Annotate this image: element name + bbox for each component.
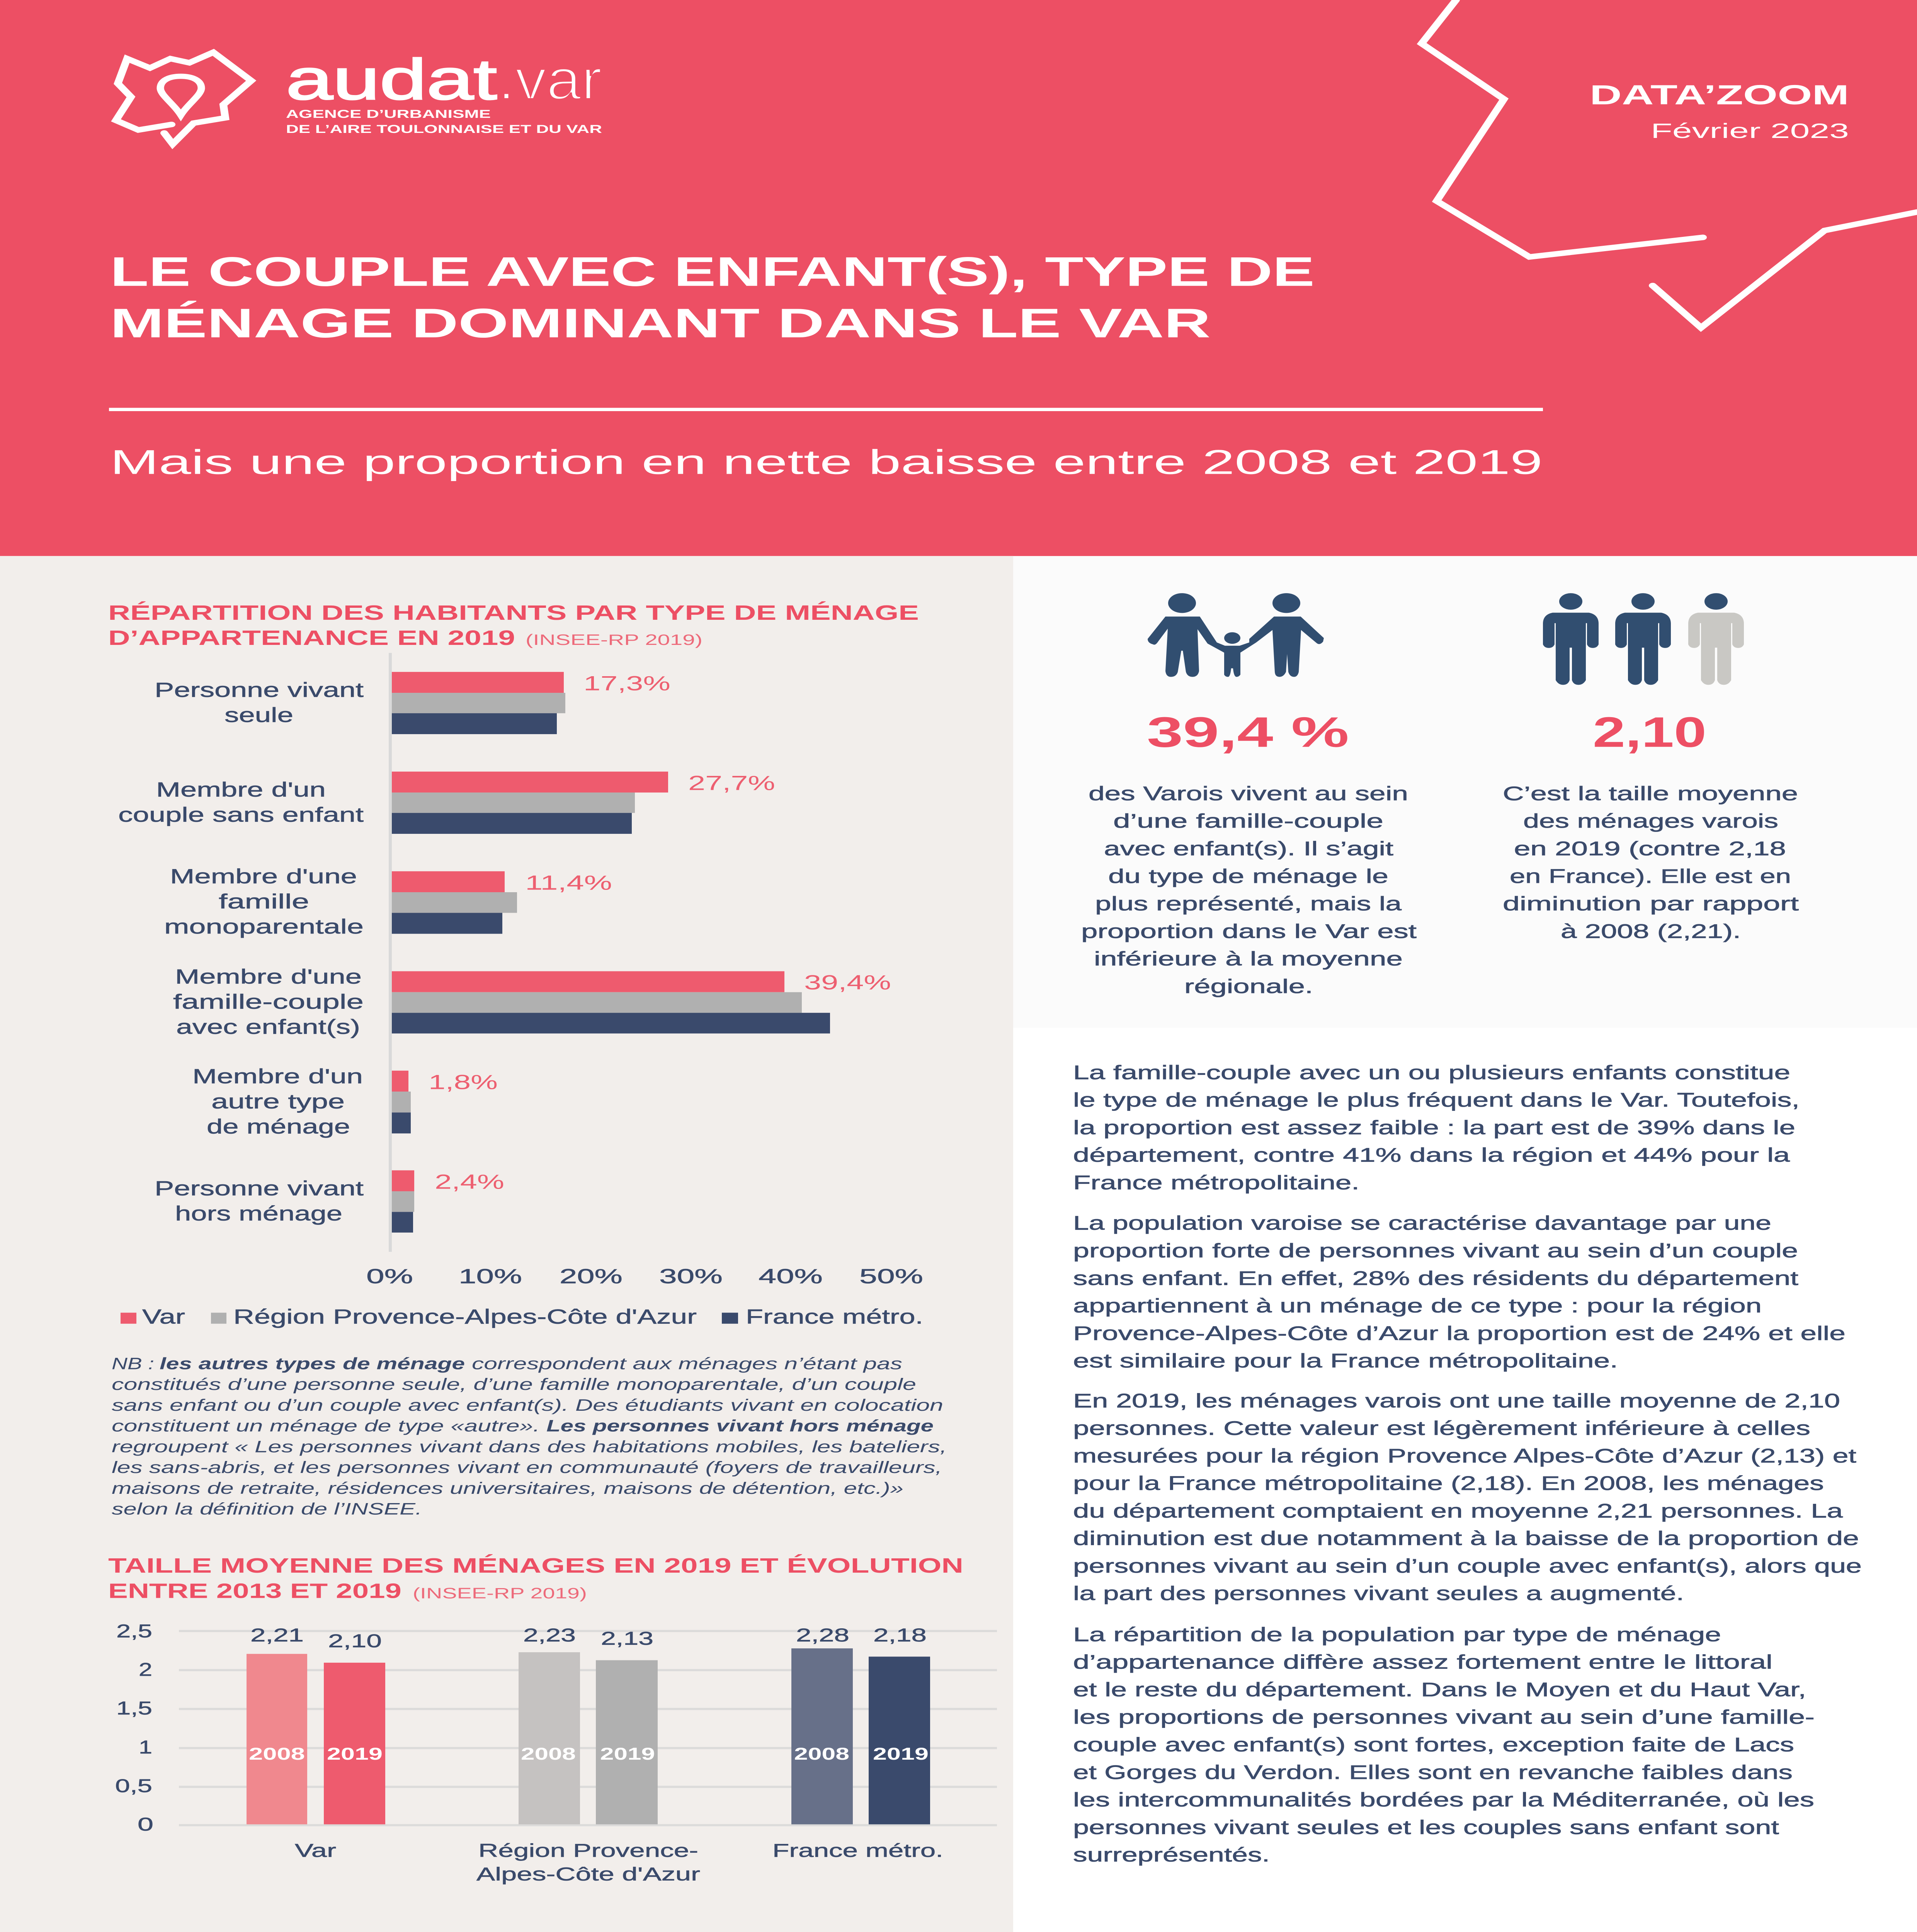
group: hors ménage: Personne vivant xyxy=(155,1177,364,1200)
group: personne vivant seule xyxy=(155,672,670,734)
note: NB definitions: regroupent « Les personnes vivant dans des habitations mobiles, les bateliers, xyxy=(112,1438,947,1456)
text block: paragraph 4: et le reste du département. Dans le Moyen et du Haut Var, xyxy=(1073,1679,1806,1701)
logo: audat.var xyxy=(116,48,602,144)
text block: paragraph 4: La répartition de la population par type de ménage xyxy=(1073,1623,1721,1646)
group: autre type de ménage: 1,8% xyxy=(429,1071,498,1094)
bars: Région: 2,23 xyxy=(523,1625,576,1646)
text block: paragraph 2: La population varoise se caractérise davantage par une xyxy=(1073,1212,1771,1234)
description: en France). Elle est en xyxy=(1510,865,1791,887)
note: NB definitions: les autres types de ménage xyxy=(160,1355,465,1373)
logo wordmark: audat xyxy=(286,48,497,112)
bars: Région: Région Provence- xyxy=(478,1840,698,1861)
group: autre type de ménage: Membre d'un xyxy=(192,1065,363,1088)
text block: paragraph 4: les proportions de personnes vivant au sein d’une famille- xyxy=(1073,1706,1815,1728)
bars: Région: Alpes-Côte d'Azur xyxy=(476,1864,700,1884)
subtitle: Mais une proportion en nette baisse entre 2008 et 2019 xyxy=(110,443,1543,481)
bars: France xyxy=(772,1625,943,1861)
bars: France: 2,28 xyxy=(796,1625,849,1646)
bars: Région xyxy=(476,1625,700,1884)
group: famille-couple avec enfants: avec enfant(s) xyxy=(176,1015,360,1038)
bars: Région: 2019 xyxy=(600,1744,655,1764)
text block: paragraph 3: du département comptaient en moyenne 2,21 personnes. La xyxy=(1073,1500,1843,1522)
bars: Région: 2008 xyxy=(521,1744,576,1764)
panel: key figure 39,4 % xyxy=(1081,593,1417,997)
description: C’est la taille moyenne xyxy=(1503,782,1798,804)
big number: 2,10 xyxy=(1593,708,1706,756)
panel: key figure 2,10 xyxy=(1503,593,1799,942)
text block: paragraph 4 xyxy=(1073,1623,1815,1866)
big number: 39,4 % xyxy=(1147,708,1349,756)
description: inférieure à la moyenne xyxy=(1094,948,1403,970)
bars: Var: 2,10 xyxy=(328,1631,382,1651)
text block: paragraph 3: personnes vivant au sein d’un couple avec enfant(s), alors que xyxy=(1073,1555,1862,1577)
panel: header banner xyxy=(0,0,1917,556)
text block: paragraph 4: couple avec enfant(s) sont fortes, exception faite de Lacs xyxy=(1073,1734,1794,1756)
text block: paragraph 4: personnes vivant seules et les couples sans enfant sont xyxy=(1073,1816,1779,1838)
heading: chart 2 xyxy=(108,1554,963,1602)
y axis labels: 2 xyxy=(139,1659,152,1680)
text block: paragraph 3: En 2019, les ménages varois ont une taille moyenne de 2,10 xyxy=(1073,1389,1840,1412)
text block: paragraph 4: les intercommunalités bordées par la Méditerranée, où les xyxy=(1073,1789,1814,1811)
group: couple sans enfant: couple sans enfant xyxy=(118,803,364,826)
heading: chart 1: RÉPARTITION DES HABITANTS PAR TYPE DE MÉNAGE xyxy=(108,601,919,624)
text block: paragraph 1 xyxy=(1073,1061,1800,1194)
x axis labels: 40% xyxy=(759,1265,823,1287)
note: NB definitions: selon la définition de l’INSEE. xyxy=(112,1500,422,1518)
text block: paragraph 3: la part des personnes vivant seules a augmenté. xyxy=(1073,1582,1684,1605)
text block: paragraph 2 xyxy=(1073,1212,1846,1372)
publication label: DATA’ZOOM xyxy=(1590,80,1849,111)
text block: paragraph 2: appartiennent à un ménage de ce type : pour la région xyxy=(1073,1295,1762,1317)
text block: paragraph 3: pour la France métropolitaine (2,18). En 2008, les ménages xyxy=(1073,1472,1824,1495)
group: famille-couple avec enfants xyxy=(173,965,891,1038)
bars: Var: 2008 xyxy=(249,1744,305,1764)
description: diminution par rapport xyxy=(1503,893,1799,915)
bars: Var: 2,21 xyxy=(250,1625,304,1646)
bars: Var: Var xyxy=(295,1840,336,1861)
text block: paragraph 2: Provence-Alpes-Côte d’Azur la proportion est de 24% et elle xyxy=(1073,1322,1846,1344)
x axis labels: 50% xyxy=(859,1265,923,1287)
group: hors ménage xyxy=(155,1170,504,1233)
x axis labels xyxy=(366,1265,923,1287)
text block: paragraph 1: France métropolitaine. xyxy=(1073,1172,1359,1194)
description: d’une famille-couple xyxy=(1113,810,1383,832)
text block: paragraph 4: et Gorges du Verdon. Elles sont en revanche faibles dans xyxy=(1073,1761,1793,1783)
y axis labels: 0,5 xyxy=(115,1775,152,1796)
note: NB definitions: correspondent aux ménages n’étant pas xyxy=(472,1355,902,1373)
description xyxy=(1503,782,1799,942)
group: autre type de ménage: de ménage xyxy=(207,1115,350,1138)
description: à 2008 (2,21). xyxy=(1561,920,1741,942)
title: LE COUPLE AVEC ENFANT(S), TYPE DE xyxy=(110,248,1315,295)
text block: paragraph 1: la proportion est assez faible : la part est de 39% dans le xyxy=(1073,1116,1795,1139)
decorative speech-bubble outline xyxy=(1422,0,1917,328)
group: famille-couple avec enfants: Membre d'une xyxy=(175,965,362,988)
group: famille monoparentale: 11,4% xyxy=(525,871,612,894)
heading: chart 1: D’APPARTENANCE EN 2019 xyxy=(108,626,515,650)
note: NB definitions: constituent un ménage de type «autre». xyxy=(112,1417,540,1435)
legend: Var xyxy=(142,1305,185,1328)
text block: paragraph 1: le type de ménage le plus fréquent dans le Var. Toutefois, xyxy=(1073,1089,1800,1111)
text block: paragraph 3: diminution est due notamment à la baisse de la proportion de xyxy=(1073,1527,1859,1549)
icon: family with child xyxy=(1148,593,1324,677)
logo tagline: AGENCE D’URBANISME xyxy=(286,107,491,121)
group: hors ménage: hors ménage xyxy=(175,1202,342,1225)
description: des Varois vivent au sein xyxy=(1089,782,1408,804)
group: famille monoparentale: monoparentale xyxy=(164,915,364,938)
heading: chart 1 xyxy=(108,601,919,650)
bars: France: 2019 xyxy=(873,1744,929,1764)
description: avec enfant(s). Il s’agit xyxy=(1104,838,1393,860)
group: couple sans enfant: Membre d'un xyxy=(156,778,326,801)
y axis labels: 2,5 xyxy=(116,1621,152,1641)
icon: three people xyxy=(1543,593,1744,685)
bar chart: average household size xyxy=(115,1621,997,1884)
text block: paragraph 3: mesurées pour la région Provence Alpes-Côte d’Azur (2,13) et xyxy=(1073,1445,1856,1467)
group: couple sans enfant: 27,7% xyxy=(688,772,775,794)
heading: chart 2: TAILLE MOYENNE DES MÉNAGES EN 2019 ET ÉVOLUTION xyxy=(108,1554,963,1577)
heading: chart 2: (INSEE-RP 2019) xyxy=(413,1585,587,1601)
note: NB definitions: les sans-abris, et les personnes vivant en communauté (foyers de travailleurs, xyxy=(112,1458,942,1477)
title xyxy=(110,248,1315,346)
text block: paragraph 3: personnes. Cette valeur est légèrement inférieure à celles xyxy=(1073,1417,1810,1439)
legend: Région Provence-Alpes-Côte d'Azur xyxy=(233,1305,697,1328)
text block: paragraph 4: d’appartenance diffère assez fortement entre le littoral xyxy=(1073,1651,1772,1673)
text block: paragraph 4: surreprésentés. xyxy=(1073,1844,1270,1866)
description: proportion dans le Var est xyxy=(1081,920,1417,942)
group: famille monoparentale: famille xyxy=(219,890,309,913)
bar chart: household type distribution xyxy=(118,653,923,1287)
x axis labels: 0% xyxy=(366,1265,413,1287)
heading: chart 1: (INSEE-RP 2019) xyxy=(526,632,703,648)
logo: audat.var: DE L’AIRE TOULONNAISE ET DU VAR xyxy=(286,122,602,136)
note: NB definitions: Les personnes vivant hors ménage xyxy=(546,1417,934,1435)
group: famille-couple avec enfants: 39,4% xyxy=(804,971,891,994)
text block: paragraph 2: sans enfant. En effet, 28% des résidents du département xyxy=(1073,1267,1798,1289)
y axis labels: 1 xyxy=(139,1737,152,1758)
group: autre type de ménage xyxy=(192,1065,498,1138)
bars: Var xyxy=(247,1625,385,1861)
description: des ménages varois xyxy=(1523,810,1778,832)
bars: France: France métro. xyxy=(772,1840,943,1861)
legend: France métro. xyxy=(746,1305,923,1328)
text block: paragraph 2: est similaire pour la France métropolitaine. xyxy=(1073,1350,1618,1372)
bars: France: 2,18 xyxy=(873,1625,927,1646)
title: MÉNAGE DOMINANT DANS LE VAR xyxy=(110,300,1211,346)
group: autre type de ménage: autre type xyxy=(211,1090,345,1113)
note: NB definitions: constitués d’une personne seule, d’une famille monoparentale, d’un couple xyxy=(112,1375,916,1394)
y axis labels: 1,5 xyxy=(116,1698,152,1719)
description xyxy=(1081,782,1417,997)
description: du type de ménage le xyxy=(1108,865,1388,887)
note: NB definitions: maisons de retraite, résidences universitaires, maisons de détention, etc.)» xyxy=(112,1479,903,1498)
bars: Région: 2,13 xyxy=(601,1628,653,1649)
group: hors ménage: 2,4% xyxy=(435,1170,504,1193)
heading: chart 2: ENTRE 2013 ET 2019 xyxy=(108,1579,401,1602)
logo: audat.var: .var xyxy=(498,48,602,112)
description: régionale. xyxy=(1184,975,1313,997)
text block: paragraph 1: La famille-couple avec un ou plusieurs enfants constitue xyxy=(1073,1061,1790,1083)
group: personne vivant seule: Personne vivant xyxy=(155,679,364,701)
x axis labels: 20% xyxy=(560,1265,623,1287)
y axis labels xyxy=(115,1621,153,1835)
x axis labels: 30% xyxy=(659,1265,723,1287)
legend xyxy=(121,1305,923,1328)
y axis labels: 0 xyxy=(138,1814,153,1835)
text block: paragraph 2: proportion forte de personnes vivant au sein d’un couple xyxy=(1073,1240,1798,1262)
group: famille monoparentale: Membre d'une xyxy=(170,865,357,888)
publication label xyxy=(1590,80,1849,143)
note: NB definitions xyxy=(112,1355,947,1518)
publication label: Février 2023 xyxy=(1651,119,1849,143)
note: NB definitions: sans enfant ou d’un couple avec enfant(s). Des étudiants vivant en colocation xyxy=(112,1396,943,1415)
x axis labels: 10% xyxy=(459,1265,522,1287)
text block: paragraph 1: département, contre 41% dans la région et 44% pour la xyxy=(1073,1144,1790,1166)
description: en 2019 (contre 2,18 xyxy=(1514,838,1786,860)
bars: France: 2008 xyxy=(794,1744,849,1764)
group: couple sans enfant xyxy=(118,772,775,834)
icon: Var outline with map pin xyxy=(116,52,251,144)
text block: paragraph 3 xyxy=(1073,1389,1862,1605)
group: famille monoparentale xyxy=(164,865,612,938)
note: NB definitions: NB : xyxy=(112,1355,154,1373)
group: personne vivant seule: 17,3% xyxy=(583,672,670,695)
group: personne vivant seule: seule xyxy=(225,704,293,726)
bars: Var: 2019 xyxy=(327,1744,383,1764)
group: famille-couple avec enfants: famille-couple xyxy=(173,990,364,1013)
description: plus représenté, mais la xyxy=(1095,893,1402,915)
